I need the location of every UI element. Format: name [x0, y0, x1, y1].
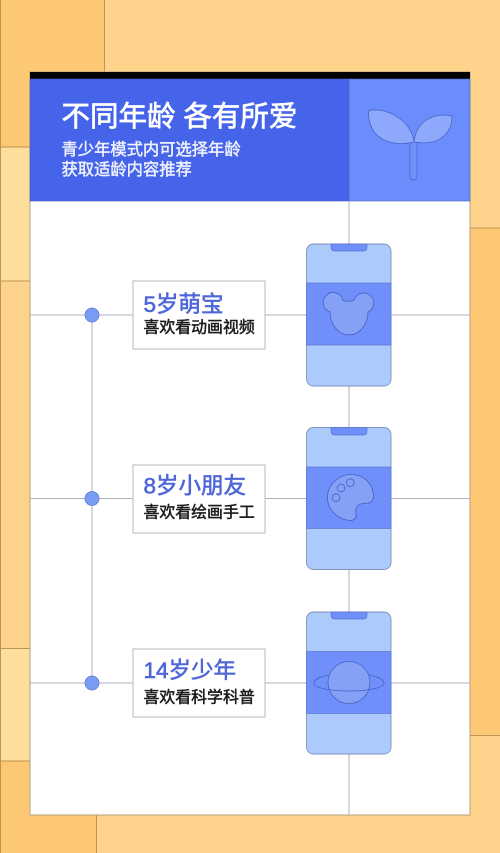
age card: 8: 喜欢看绘画手工: [144, 504, 255, 522]
subtitle: [62, 141, 241, 179]
phone: bear: [306, 244, 391, 386]
age card: 8: [133, 465, 265, 533]
age card: 14: 喜欢看科学科普: [144, 688, 255, 706]
main card: [30, 72, 470, 815]
age card: 14: [133, 649, 265, 717]
phone: palette: [306, 428, 391, 570]
subtitle: 青少年模式内可选择年龄: [62, 141, 241, 159]
timeline dots: [85, 308, 99, 690]
age card: 8: 8岁小朋友: [144, 474, 246, 498]
header panel: title area: [30, 79, 349, 201]
age card: 5: 5岁萌宝: [144, 292, 224, 317]
age card: 14: 14岁少年: [144, 658, 236, 683]
header panel: sprout icon: [349, 79, 470, 201]
top black bar: [30, 72, 470, 79]
icon: palette: [328, 474, 374, 520]
age card: 5: [133, 281, 265, 349]
grid lines: [30, 201, 470, 815]
icon: planet: [314, 662, 384, 704]
title: 不同年龄 各有所爱: [62, 101, 297, 133]
subtitle: 获取适龄内容推荐: [62, 161, 192, 179]
age card: 5: 喜欢看动画视频: [144, 318, 255, 336]
icon: bear: [323, 293, 374, 335]
phone: planet: [306, 612, 391, 754]
